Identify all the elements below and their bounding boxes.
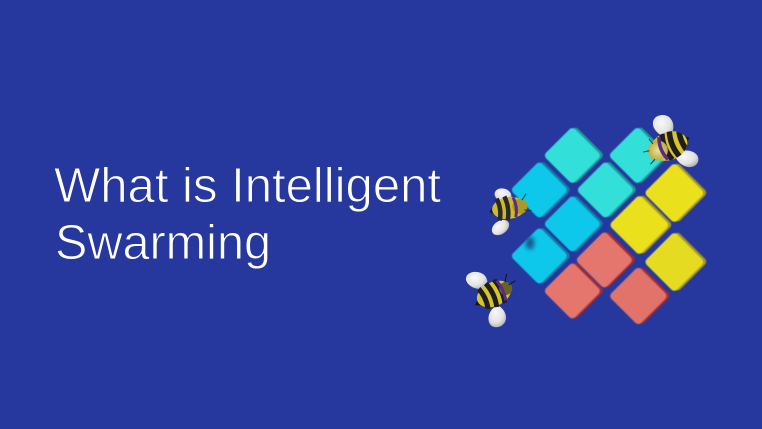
- bee: top right: [640, 115, 698, 169]
- tile: blue centre: [543, 193, 604, 254]
- bee body: [475, 274, 516, 309]
- tile grid: [510, 125, 708, 327]
- tile: yellow centre: [609, 193, 673, 257]
- bee body: [488, 193, 532, 223]
- title: Swarming: [55, 216, 271, 270]
- tile: red centre: [575, 229, 636, 290]
- tile: blue lower: [510, 225, 571, 286]
- tile: red right: [609, 265, 671, 327]
- tile: teal top: [543, 125, 604, 186]
- bee: bottom left: [466, 272, 522, 327]
- bee body: [643, 131, 690, 165]
- tile: teal centre: [576, 159, 637, 220]
- bee wings: [653, 115, 698, 167]
- bee: middle left: [489, 188, 532, 236]
- infographic canvas: [54, 115, 707, 328]
- title: [54, 159, 441, 270]
- tile: yellow lower: [644, 230, 708, 294]
- tile: blue top: [510, 159, 571, 220]
- tile: red left: [543, 260, 604, 321]
- tile: yellow top: [644, 161, 708, 225]
- bee wings: [466, 272, 506, 327]
- tile: teal right: [608, 125, 669, 186]
- bee shadow on blue tile: [526, 236, 534, 250]
- bee wings: [489, 187, 513, 238]
- title: What is Intelligent: [54, 159, 441, 213]
